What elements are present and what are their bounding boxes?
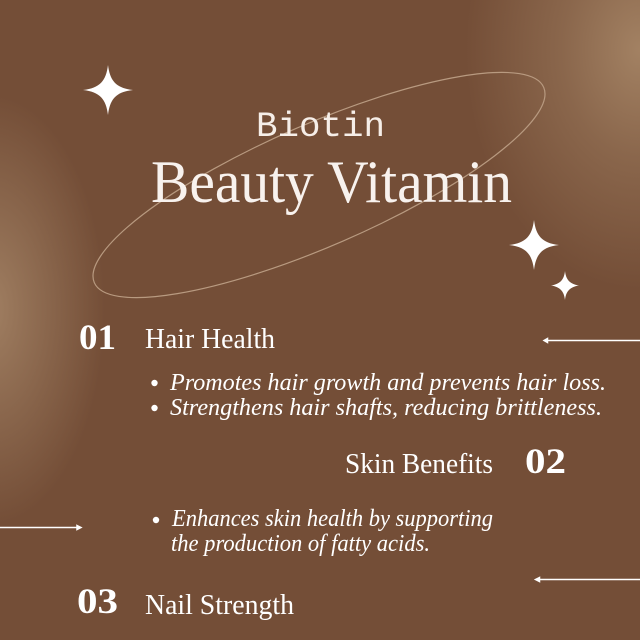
heading: Beauty Vitamin: Beauty Vitamin — [151, 149, 512, 215]
arrow pointing left — [544, 338, 640, 342]
bullet list — [151, 370, 606, 421]
bullet text: Enhances skin health by supporting — [171, 506, 493, 532]
bullet text — [153, 506, 493, 557]
label Nail Strength: Nail Strength — [145, 589, 294, 621]
bullet list: Promotes hair growth and prevents hair loss. — [169, 370, 606, 396]
bullet text: the production of fatty acids. — [171, 531, 430, 557]
icon: large sparkle right — [509, 220, 559, 270]
number 01: 01 — [79, 317, 116, 357]
heading: Biotin: Biotin — [256, 107, 385, 147]
label Hair Health: Hair Health — [145, 323, 275, 355]
arrow pointing right — [0, 526, 81, 530]
icon: large sparkle top left — [83, 65, 133, 115]
bullet list: Strengthens hair shafts, reducing brittleness. — [170, 395, 602, 421]
section 03: Nail Strength — [77, 578, 640, 621]
decorative ellipse outline — [70, 31, 568, 339]
label Skin Benefits: Skin Benefits — [345, 448, 493, 480]
number 03: 03 — [77, 581, 118, 621]
arrow pointing left — [536, 578, 640, 582]
number 02: 02 — [525, 441, 566, 481]
section 01: Hair Health — [79, 317, 640, 421]
icon: small sparkle right — [551, 271, 579, 300]
section 02: Skin Benefits — [0, 441, 566, 557]
